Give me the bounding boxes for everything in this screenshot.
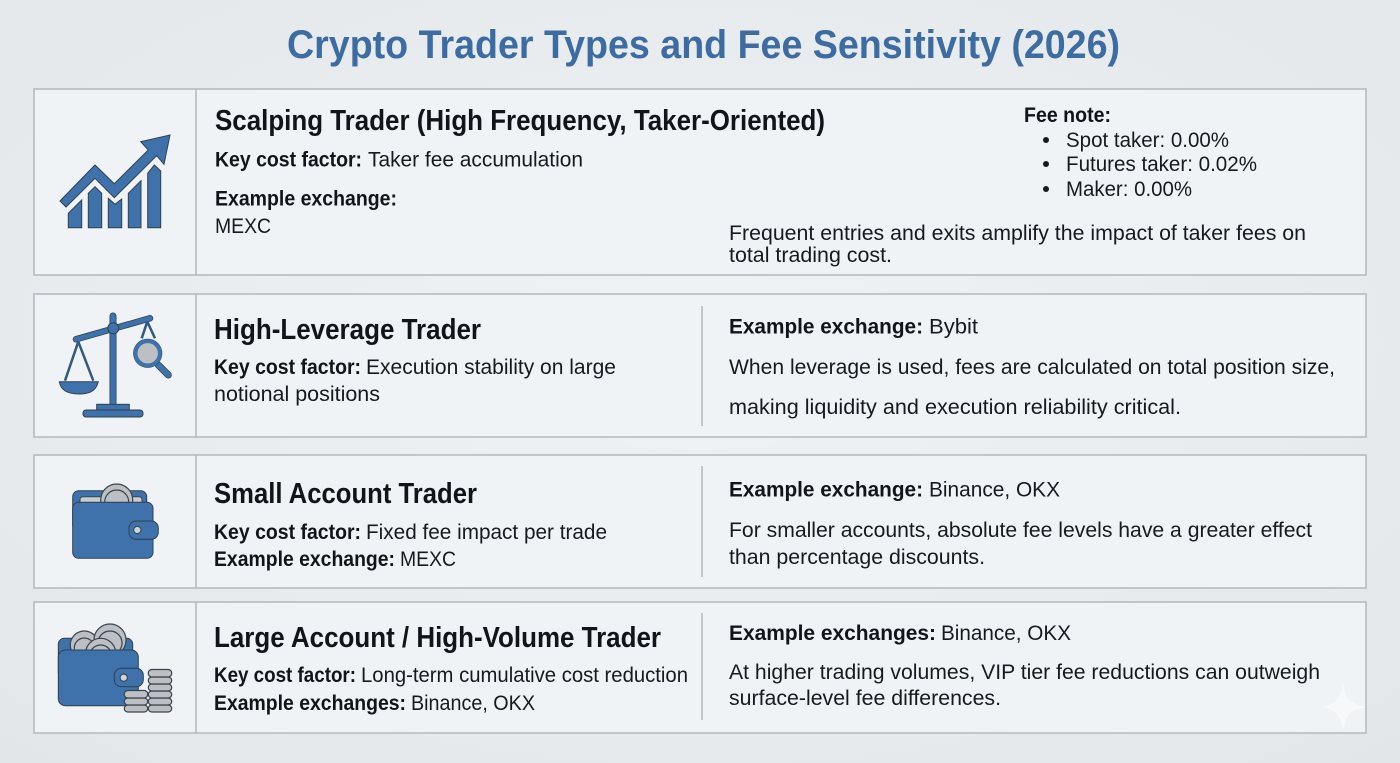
fee note: Fee note: — [1024, 103, 1111, 127]
fee note: Spot taker: 0.00% — [1066, 128, 1229, 152]
key cost factor: Key cost factor: — [214, 355, 361, 379]
description: At higher trading volumes, VIP tier fee reductions can outweigh — [729, 660, 1320, 684]
heading: scalping trader: Scalping Trader (High Frequency, Taker-Oriented) — [215, 105, 825, 137]
title: Crypto Trader Types and Fee Sensitivity (2026) — [287, 23, 1120, 67]
heading: high-leverage trader: High-Leverage Trader — [214, 314, 481, 346]
key cost factor: Fixed fee impact per trade — [366, 520, 607, 544]
example exchanges — [214, 691, 535, 715]
example exchange: Example exchange: — [215, 186, 397, 210]
example exchange: MEXC — [215, 214, 271, 238]
key cost factor — [214, 520, 607, 544]
example exchanges: Example exchanges: — [214, 691, 406, 715]
example exchanges, right column: Binance, OKX — [941, 621, 1071, 645]
heading: small account trader: Small Account Trader — [214, 478, 477, 510]
description: Frequent entries and exits amplify the impact of taker fees on — [729, 221, 1306, 245]
icon: rising chart with arrow — [60, 135, 170, 228]
example exchange: Bybit — [929, 314, 978, 338]
panel: scalping trader — [34, 89, 1366, 275]
description — [729, 518, 1312, 569]
example exchanges: Binance, OKX — [411, 691, 535, 715]
example exchange — [215, 186, 397, 238]
description: than percentage discounts. — [729, 545, 985, 569]
description: making liquidity and execution reliability critical. — [729, 395, 1181, 419]
description: When leverage is used, fees are calculated on total position size, — [729, 355, 1335, 379]
description — [729, 221, 1306, 267]
icon: full wallet with coin stacks — [58, 624, 172, 712]
key cost factor: Long-term cumulative cost reduction — [361, 663, 688, 687]
icon: wallet with coin — [73, 484, 158, 558]
example exchanges, right column — [729, 621, 1071, 645]
key cost factor: Execution stability on large — [366, 355, 616, 379]
example exchange: MEXC — [400, 547, 456, 571]
icon: sparkle watermark — [1320, 684, 1367, 731]
fee note — [1024, 103, 1257, 201]
key cost factor — [214, 355, 616, 406]
fee note: Futures taker: 0.02% — [1066, 152, 1257, 176]
example exchange: Example exchange: — [214, 547, 395, 571]
fee note: Maker: 0.00% — [1066, 177, 1192, 201]
example exchange, right column: Example exchange: — [729, 478, 923, 502]
key cost factor: Key cost factor: — [215, 148, 362, 172]
example exchange: Example exchange: — [729, 314, 923, 338]
key cost factor — [215, 148, 583, 172]
example exchange, right column — [729, 478, 1060, 502]
panel: small account trader — [34, 455, 1366, 588]
example exchanges, right column: Example exchanges: — [729, 621, 936, 645]
icon: balance scale with magnifier — [59, 316, 168, 417]
panel: large account trader — [34, 602, 1366, 733]
description: For smaller accounts, absolute fee levels have a greater effect — [729, 518, 1312, 542]
example exchange, right column: Binance, OKX — [929, 478, 1060, 502]
panel: high-leverage trader — [34, 294, 1366, 437]
description: surface-level fee differences. — [729, 686, 1001, 710]
heading: large account trader: Large Account / High-Volume Trader — [214, 622, 661, 654]
description — [729, 355, 1335, 419]
description — [729, 660, 1320, 710]
key cost factor: Key cost factor: — [214, 520, 361, 544]
description: total trading cost. — [729, 243, 892, 267]
key cost factor: Taker fee accumulation — [368, 148, 583, 172]
key cost factor — [214, 663, 688, 687]
key cost factor: Key cost factor: — [214, 663, 356, 687]
key cost factor: notional positions — [214, 382, 380, 406]
